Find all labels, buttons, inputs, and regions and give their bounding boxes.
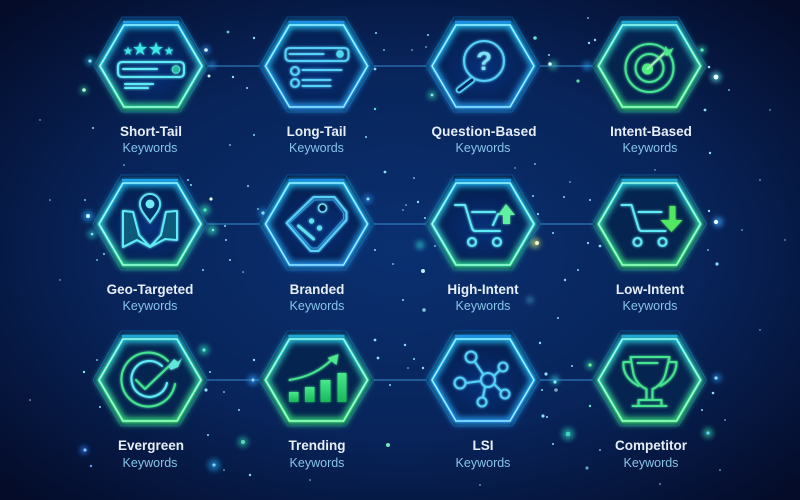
label: Low-Intent Keywords [616, 282, 685, 313]
label: Question-Based Keywords: Question-Based [432, 124, 536, 139]
label: Geo-Targeted Keywords: Keywords [123, 299, 177, 313]
label: Long-Tail Keywords: Long-Tail [287, 124, 346, 139]
card: Question-Based Keywords [426, 17, 540, 155]
label: Short-Tail Keywords: Keywords [123, 141, 177, 155]
card: Intent-Based Keywords [592, 17, 706, 155]
icon: magnifier with question mark: ? [476, 46, 492, 76]
label: Trending Keywords [288, 438, 346, 470]
label: Evergreen Keywords [118, 438, 184, 470]
label: Short-Tail Keywords: Short-Tail [120, 124, 182, 139]
card: LSI Keywords [426, 331, 540, 470]
label: Branded Keywords [290, 282, 344, 313]
icon: search bar and list [286, 48, 348, 87]
icon: evergreen target with check [121, 353, 182, 407]
label: Competitor Keywords: Competitor [615, 438, 688, 453]
icon: cart with up arrow [455, 204, 515, 246]
label: Long-Tail Keywords [287, 124, 346, 155]
label: High-Intent Keywords [447, 282, 519, 313]
label: Branded Keywords: Keywords [290, 299, 344, 313]
icon: cart with down arrow [622, 205, 682, 246]
icon: trophy [623, 357, 676, 406]
card: Competitor Keywords [592, 331, 706, 470]
label: Competitor Keywords [615, 438, 688, 470]
label: Long-Tail Keywords: Keywords [289, 141, 344, 155]
label: Low-Intent Keywords: Low-Intent [616, 282, 685, 297]
card: Trending Keywords [260, 331, 374, 470]
icon: stars and search bar: ★ [123, 44, 133, 58]
label: Competitor Keywords: Keywords [624, 456, 678, 470]
card: Geo-Targeted Keywords [93, 175, 207, 313]
label: Question-Based Keywords [432, 124, 536, 155]
label: High-Intent Keywords: Keywords [456, 299, 510, 313]
label: LSI Keywords [456, 438, 510, 470]
icon: target with arrow [626, 44, 674, 92]
label: Intent-Based Keywords: Keywords [623, 141, 677, 155]
label: Trending Keywords: Trending [288, 438, 346, 453]
label: Intent-Based Keywords: Intent-Based [610, 124, 692, 139]
connector lines [207, 66, 594, 380]
icon: rising bar chart with arrow [289, 354, 346, 402]
card: Long-Tail Keywords [260, 17, 374, 155]
label: Evergreen Keywords: Evergreen [118, 438, 184, 453]
label: High-Intent Keywords: High-Intent [447, 282, 519, 297]
label: Evergreen Keywords: Keywords [123, 456, 177, 470]
label: Geo-Targeted Keywords: Geo-Targeted [107, 282, 193, 297]
icon: stars and search bar: ★ [132, 39, 148, 60]
icon: network nodes [454, 352, 510, 406]
label: LSI Keywords: Keywords [456, 456, 510, 470]
label: Low-Intent Keywords: Keywords [623, 299, 677, 313]
glowing particles [80, 46, 723, 471]
card: Short-Tail Keywords [94, 17, 208, 155]
label: Short-Tail Keywords [120, 124, 182, 155]
label: Intent-Based Keywords [610, 124, 692, 155]
card: High-Intent Keywords [426, 175, 540, 313]
card: Low-Intent Keywords [592, 175, 706, 313]
icon: stars and search bar: ★ [164, 44, 174, 58]
label: Trending Keywords: Keywords [290, 456, 344, 470]
label: LSI Keywords: LSI [472, 438, 494, 453]
icon: brand tag [286, 197, 346, 251]
icon: stars and search bar [118, 39, 184, 88]
label: Question-Based Keywords: Keywords [456, 141, 510, 155]
label: Branded Keywords: Branded [290, 282, 344, 297]
label: Geo-Targeted Keywords [107, 282, 193, 313]
icon: stars and search bar: ★ [148, 39, 164, 60]
card: Evergreen Keywords [93, 331, 207, 470]
card: Branded Keywords [260, 175, 374, 313]
icon: map with location pin [123, 194, 177, 247]
